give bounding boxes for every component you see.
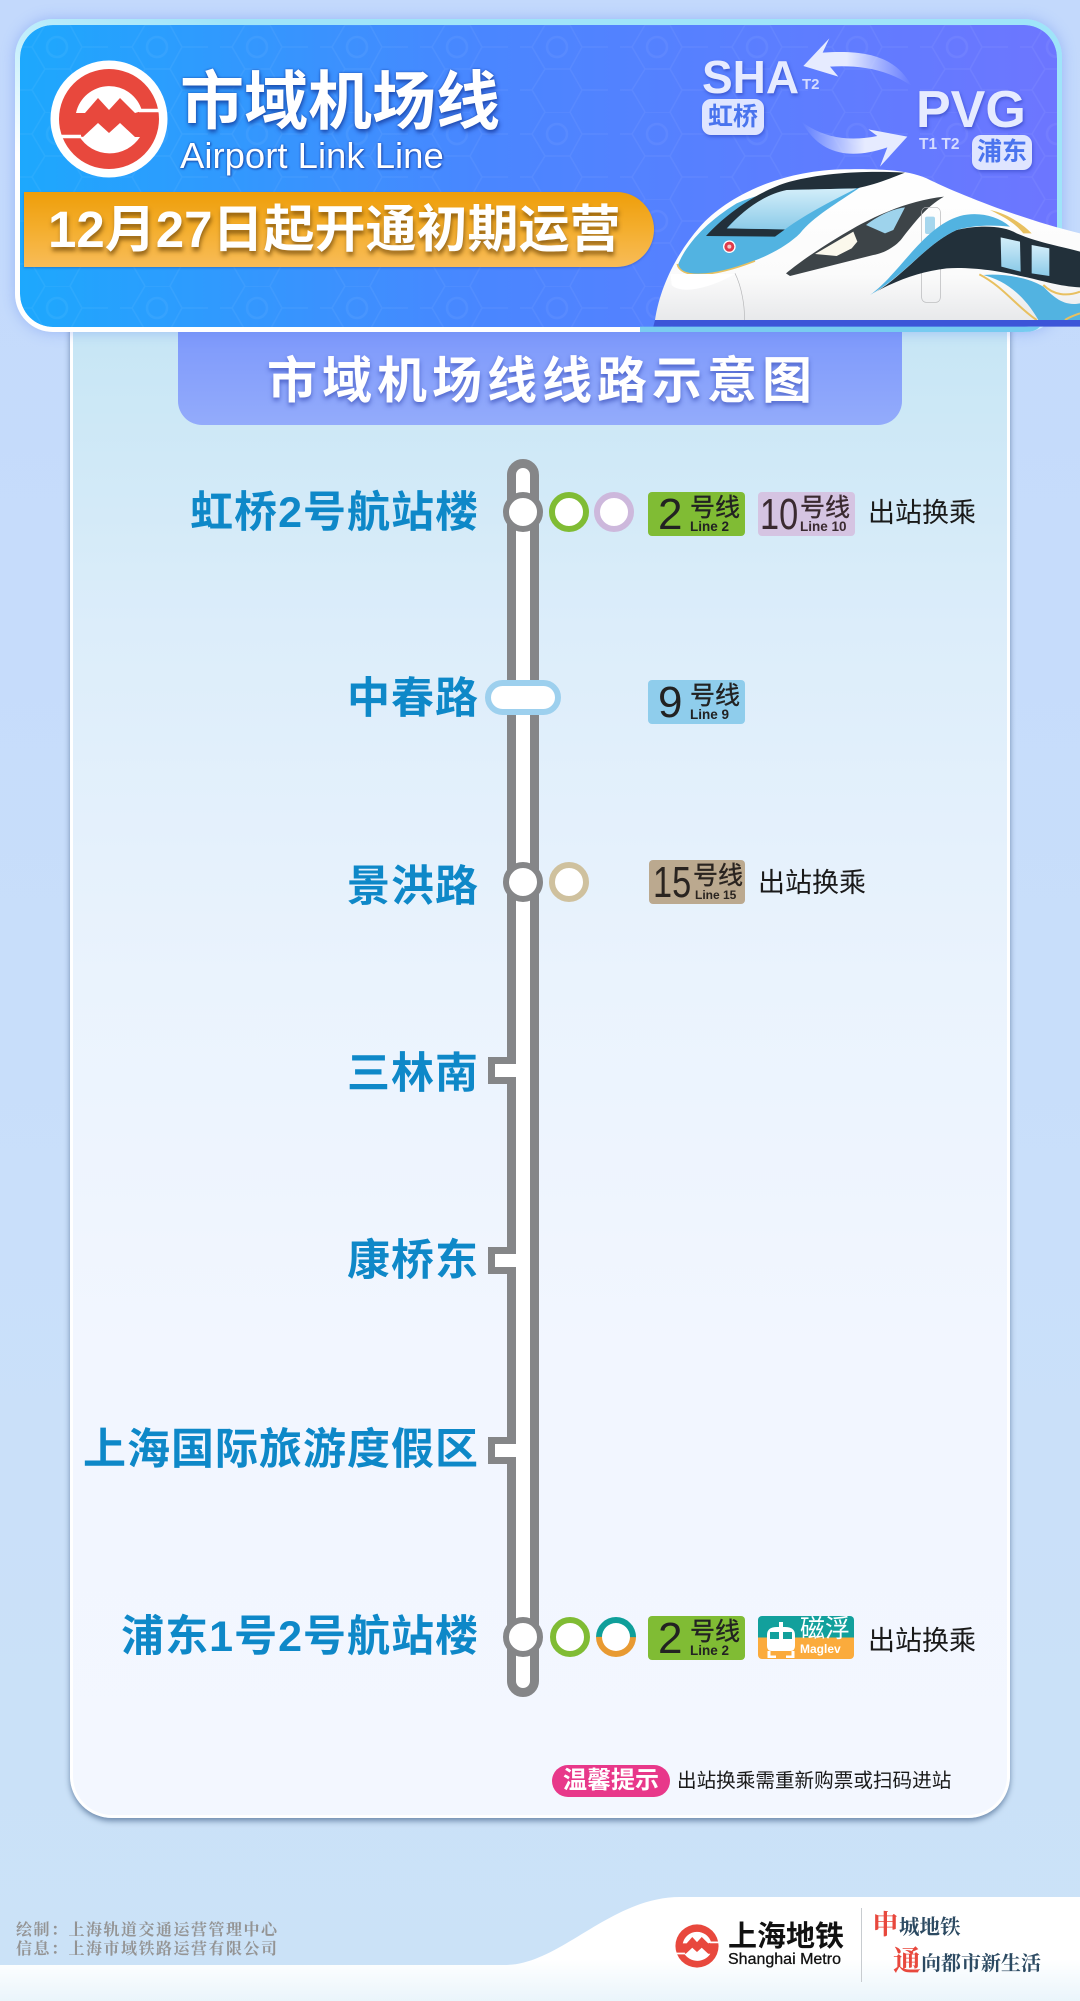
badge: line 2: 号线 — [690, 494, 740, 522]
label: PVG: PVG — [916, 81, 1026, 139]
note: exit transfer: 出站换乘 — [868, 1626, 976, 1656]
label: Hongqiao pill: 虹桥 — [708, 103, 758, 131]
footer white wave — [0, 1897, 1080, 2001]
title: Airport Link Line Chinese: 市域机场线 — [180, 66, 500, 138]
station: Hongqiao T2: 虹桥2号航站楼 — [190, 489, 479, 537]
tip text: 出站换乘需重新购票或扫码进站 — [677, 1770, 951, 1792]
tip pill — [552, 1765, 670, 1797]
banner: opening date — [24, 192, 654, 267]
badge: line 9: Line 9 — [690, 707, 729, 722]
stub: Sanlin South — [488, 1057, 516, 1084]
credit: drawn by: 绘制：上海轨道交通运营管理中心 — [16, 1922, 279, 1939]
arrow to SHA — [803, 38, 912, 86]
interchange ring: maglev — [588, 1609, 644, 1665]
station: Pudong T1 T2: 浦东1号2号航站楼 — [121, 1613, 479, 1661]
divider — [861, 1908, 862, 1982]
badge: line 10 — [758, 492, 855, 536]
badge: line 2: Line 2 — [690, 1643, 729, 1658]
credit: information: 信息：上海市域铁路运营有限公司 — [16, 1941, 279, 1958]
label: SHA: SHA — [702, 51, 799, 103]
slogan line 2: 通向都市新生活 — [893, 1946, 1041, 1977]
brand: Shanghai Metro English: Shanghai Metro — [728, 1951, 841, 1968]
date text: 12月27日起开通初期运营 — [48, 201, 620, 258]
icon: Shanghai Metro logo — [50, 60, 168, 178]
badge: maglev — [758, 1616, 854, 1659]
interchange ring: line 2 — [550, 1617, 590, 1657]
title: English: Airport Link Line — [180, 135, 444, 176]
brand: Shanghai Metro Chinese: 上海地铁 — [728, 1921, 844, 1953]
header fill with hex pattern — [20, 25, 1057, 327]
header banner — [15, 19, 1062, 332]
icon: maglev train — [767, 1622, 795, 1658]
panel: route map card — [70, 290, 1010, 1818]
badge: line 9: 号线 — [690, 682, 740, 710]
label: T2: T2 — [802, 76, 820, 93]
station: Sanlin South: 三林南 — [347, 1050, 479, 1098]
interchange ring: line 10 — [594, 492, 634, 532]
station: Zhongchun Road: 中春路 — [347, 675, 479, 723]
badge: line 2: Line 2 — [690, 519, 729, 534]
interchange ring: line 2 — [549, 492, 589, 532]
badge: line 9 — [648, 680, 745, 724]
label: Hongqiao pill — [702, 99, 764, 135]
station: Kangqiao East: 康桥东 — [347, 1237, 479, 1285]
station: Jinghong Road: 景洪路 — [347, 863, 479, 911]
node: Hongqiao T2 — [503, 492, 543, 532]
badge: line 2 — [648, 492, 745, 536]
tip pill: 温馨提示 — [563, 1767, 659, 1794]
note: exit transfer: 出站换乘 — [758, 868, 866, 898]
station: Shanghai International Resort: 上海国际旅游度假区 — [83, 1426, 479, 1474]
slogan line 1: 申城地铁 — [872, 1910, 960, 1940]
stub: Kangqiao East — [488, 1247, 516, 1274]
heading tab: route diagram title — [178, 320, 902, 425]
badge: line 15: Line 15 — [695, 888, 736, 902]
icon: route arrows SHA PVG — [804, 38, 908, 166]
node: Pudong T1 T2 — [503, 1617, 543, 1657]
badge: line 10: Line 10 — [800, 519, 847, 534]
label: Pudong pill — [972, 135, 1032, 170]
track rail — [507, 459, 539, 1697]
node: Jinghong Road — [503, 862, 543, 902]
stub: Shanghai International Resort — [488, 1437, 516, 1464]
badge: line 2: 号线 — [690, 1618, 740, 1646]
label: T1 T2: T1 T2 — [919, 136, 959, 153]
node: Zhongchun Road — [485, 680, 561, 715]
badge: line 2 — [648, 1616, 745, 1660]
badge: line 15: 号线 — [693, 862, 743, 890]
arrow to PVG — [802, 122, 907, 167]
badge: line 10: 号线 — [800, 494, 850, 522]
icon: train illustration — [640, 169, 1080, 332]
icon: footer metro logo — [675, 1924, 719, 1968]
badge: maglev: Maglev — [800, 1642, 841, 1656]
label: Pudong pill: 浦东 — [977, 138, 1027, 166]
note: exit transfer: 出站换乘 — [868, 498, 976, 528]
badge: line 15 — [649, 860, 745, 904]
interchange ring: line 15 — [549, 862, 589, 902]
heading text: 市域机场线线路示意图 — [267, 353, 817, 409]
